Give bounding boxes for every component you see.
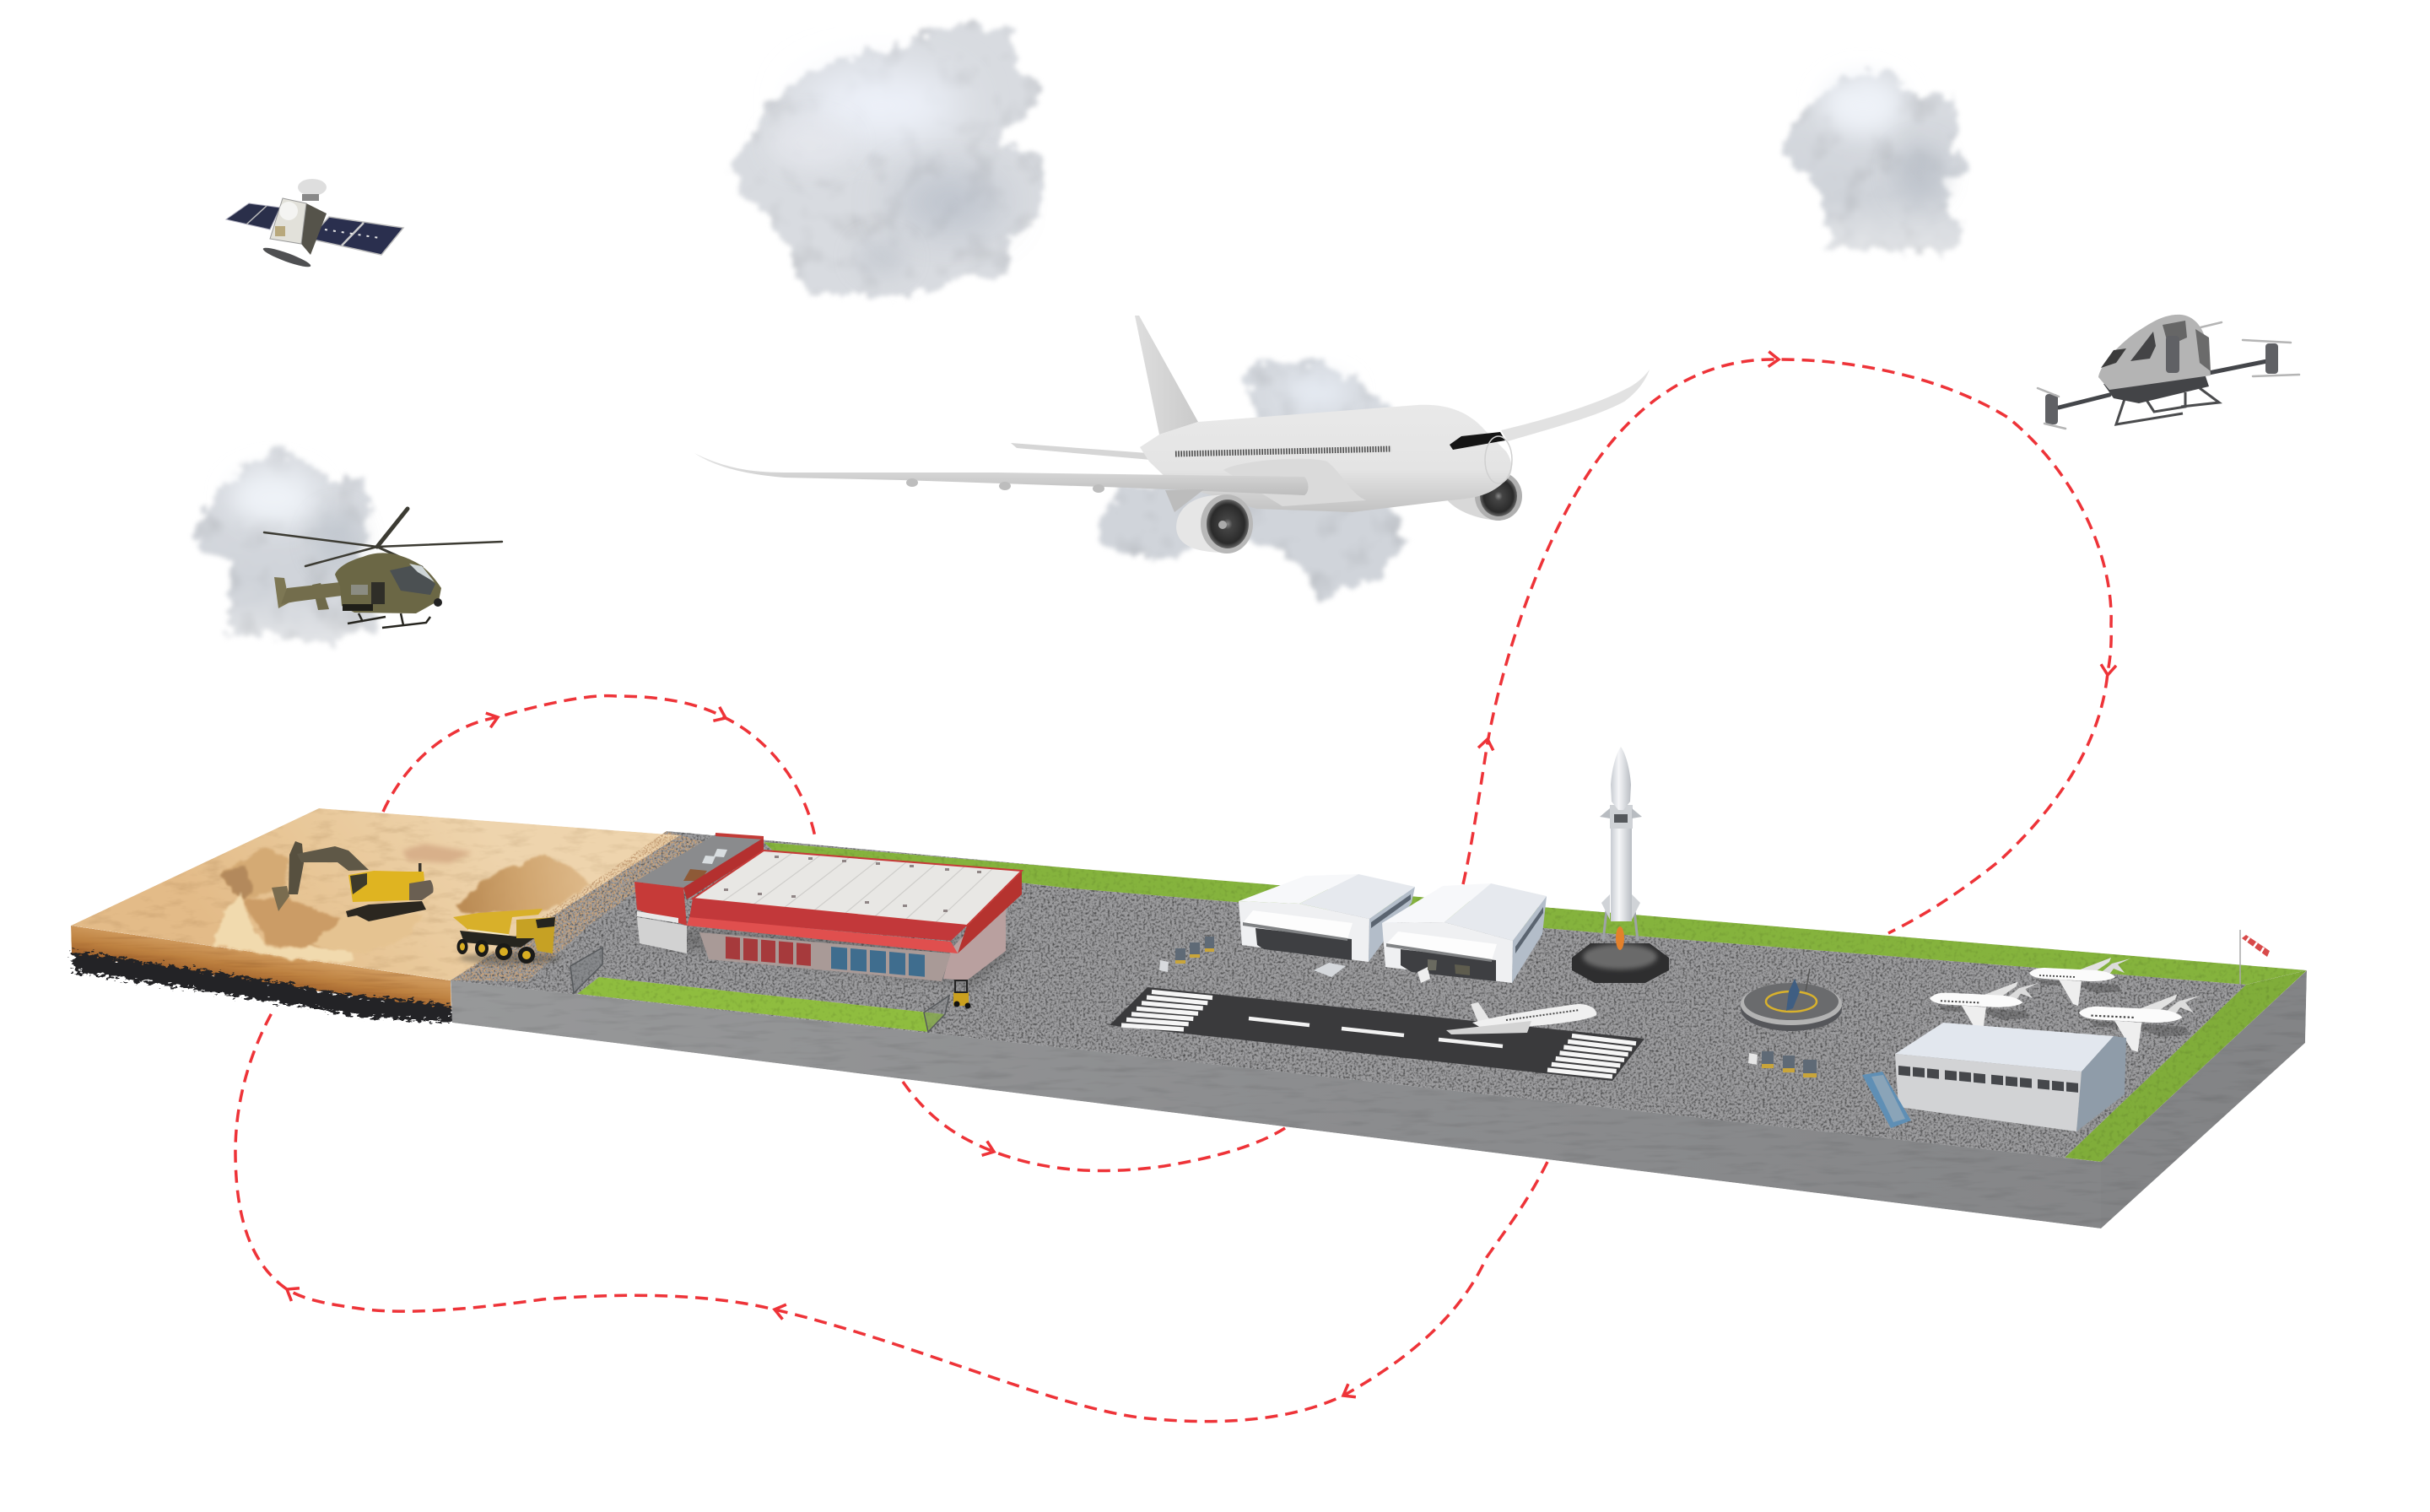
fuselage <box>1140 405 1512 512</box>
small back mound <box>402 844 472 863</box>
pad smoke <box>1583 944 1657 969</box>
excavation site <box>211 844 591 962</box>
icon: forklift <box>953 980 970 1009</box>
red warehouse <box>634 833 1022 987</box>
annex windows <box>637 911 678 923</box>
cab block <box>516 917 555 953</box>
windows <box>2091 1016 2135 1018</box>
front lower wall <box>699 932 951 981</box>
annex roof <box>634 834 764 888</box>
body dark side <box>301 203 327 255</box>
cloud: behind helicopter <box>194 451 380 643</box>
near wing <box>694 453 1308 495</box>
lower stage <box>1611 827 1632 921</box>
gravel surface <box>451 831 2307 1162</box>
sand to gravel transition <box>451 831 705 981</box>
arrow 1 <box>486 710 500 727</box>
nose radome <box>1485 436 1512 483</box>
truss <box>1243 922 1347 941</box>
path: upper right loop <box>1463 359 2111 933</box>
door opening <box>1256 928 1352 960</box>
arrow 2 <box>713 707 729 725</box>
fin <box>2098 958 2130 978</box>
rotor blades <box>264 509 502 567</box>
arrow 7 <box>1478 737 1495 750</box>
roof right plane <box>1299 874 1415 919</box>
roof <box>693 850 1022 926</box>
roof right plane <box>1444 883 1547 941</box>
fuselage <box>2029 968 2115 981</box>
top dish <box>298 179 327 196</box>
body <box>348 871 424 902</box>
arrow 4 <box>1340 1384 1356 1402</box>
fin <box>2005 983 2039 1003</box>
cloud: behind airliner <box>1098 359 1407 599</box>
near wing <box>1962 1006 1986 1034</box>
lower hull <box>2103 374 2209 403</box>
side windows <box>1515 907 1543 953</box>
path: upper left loop <box>383 696 816 841</box>
far wing <box>2078 958 2111 975</box>
right wall <box>2076 1036 2126 1131</box>
cabin <box>2098 315 2211 390</box>
near wing <box>2059 980 2082 1006</box>
icon: parked jet B <box>1930 982 2039 1034</box>
annex red wall <box>634 882 687 926</box>
skylights <box>714 849 727 857</box>
right concrete side <box>2101 970 2307 1228</box>
fuselage <box>2079 1007 2182 1023</box>
mound below tracks <box>310 914 424 953</box>
hangar 1 <box>1239 874 1415 962</box>
big dirt pile <box>456 855 591 914</box>
back ridge <box>219 848 289 900</box>
front fascia <box>689 899 967 941</box>
fuselage <box>1930 993 2022 1007</box>
landing gear <box>2116 388 2219 424</box>
right solar panel <box>310 217 403 255</box>
awning <box>687 917 958 953</box>
skids <box>348 613 430 628</box>
tail fins <box>274 577 289 608</box>
tracks <box>346 901 426 921</box>
icon: excavator <box>272 841 434 921</box>
icon: satellite <box>226 179 403 270</box>
icon: dump truck <box>453 909 561 964</box>
annex white wall <box>637 917 687 953</box>
body white side <box>270 198 306 244</box>
camera <box>434 598 442 607</box>
near wing <box>2114 1021 2141 1052</box>
warehouse shadow <box>640 928 1012 987</box>
icon: helicopter <box>264 509 502 628</box>
diorama base block <box>71 808 2307 1228</box>
grass: right strip <box>2065 970 2307 1162</box>
flap fairings <box>906 478 1104 493</box>
far wing <box>1983 982 2018 1001</box>
bed <box>453 909 543 935</box>
cloud: large top centre <box>728 25 1044 302</box>
arrow 8 <box>1768 352 1779 367</box>
windsock <box>2240 930 2270 985</box>
luggage carts left <box>1159 937 1214 972</box>
side wall lower <box>943 890 1006 980</box>
grass: back strip <box>764 842 2307 985</box>
wheels <box>457 939 535 964</box>
tail fin <box>1135 316 1198 435</box>
launch pad <box>1572 943 1669 983</box>
engine pylon <box>1165 489 1204 512</box>
door opening <box>1401 949 1496 981</box>
red doors <box>726 937 811 966</box>
boarding stairs <box>1862 1072 1911 1128</box>
chassis <box>460 931 534 948</box>
arrow 5 <box>773 1302 786 1320</box>
fence <box>570 948 949 1032</box>
icon: parked jet A <box>2029 958 2130 1006</box>
roof left plane <box>1239 874 1358 904</box>
rocket <box>1572 747 1669 983</box>
cab window <box>350 873 367 894</box>
arrow 3 <box>982 1141 996 1158</box>
counterweight <box>409 880 434 900</box>
front wall <box>1895 1054 2082 1131</box>
far wing <box>2138 994 2177 1016</box>
path: lower sweep <box>235 1010 1547 1422</box>
right wall <box>1369 887 1415 962</box>
centreline <box>1249 1018 1503 1046</box>
landing legs <box>1603 903 1638 941</box>
tailplane <box>1011 443 1161 461</box>
rotors <box>2045 336 2278 424</box>
cabin windows <box>1175 449 1391 454</box>
shadow <box>1939 1006 2030 1020</box>
front <box>1239 901 1369 962</box>
side windows <box>1371 894 1411 928</box>
windows <box>1898 1066 2078 1093</box>
grass: front patch <box>577 977 945 1032</box>
sand top <box>71 808 680 980</box>
wing root fairing <box>1223 459 1366 506</box>
icon: parked jet C <box>2079 994 2200 1052</box>
near engine <box>1176 494 1253 554</box>
icon: business jet on runway <box>1446 1002 1596 1034</box>
helipad <box>1741 969 1842 1031</box>
bottom dish <box>262 245 312 270</box>
hangar 2 <box>1382 883 1547 983</box>
arrow 6 <box>283 1282 300 1301</box>
roof <box>1895 1023 2114 1072</box>
arrow 9 <box>2100 664 2116 676</box>
terminal building <box>1895 1023 2126 1131</box>
truss <box>1386 943 1492 962</box>
lit front ridge <box>211 894 354 962</box>
threshold stripes <box>1121 992 1636 1077</box>
stick <box>289 841 304 894</box>
arms <box>2059 361 2267 408</box>
nose and upper stage <box>1611 747 1631 810</box>
ground vehicles by hangars <box>1314 959 1470 983</box>
cloud: top right <box>1783 69 1966 253</box>
annex right parapet <box>683 838 764 899</box>
shadow <box>2089 1021 2190 1037</box>
right wall <box>1512 896 1547 983</box>
canopy <box>390 565 435 595</box>
icon: airliner <box>694 316 1650 554</box>
fuselage <box>335 553 441 613</box>
bucket <box>272 886 289 911</box>
far engine <box>1443 472 1522 521</box>
soil side <box>71 926 452 1023</box>
front <box>1382 922 1513 983</box>
path: under block <box>903 1082 1285 1171</box>
shadow <box>2038 980 2122 993</box>
boom <box>297 846 369 871</box>
windows <box>1941 1001 1979 1002</box>
door header <box>1243 910 1353 939</box>
far wing <box>1501 370 1650 441</box>
tail boom <box>281 582 342 604</box>
flame <box>1616 926 1624 950</box>
missile pod <box>343 604 373 611</box>
runway <box>1110 987 1644 1081</box>
fin <box>2162 996 2200 1018</box>
exhaust <box>418 863 422 872</box>
front concrete side <box>451 980 2101 1228</box>
interstage <box>1610 805 1633 829</box>
left solar panel <box>226 203 280 230</box>
blue doors <box>831 947 925 977</box>
flight path loops <box>235 352 2116 1422</box>
helipad helicopter <box>1786 979 1800 1011</box>
windows <box>2039 975 2076 977</box>
cockpit <box>1450 432 1505 450</box>
side wall red <box>958 871 1022 953</box>
icon: passenger drone <box>2038 315 2299 429</box>
pit floor <box>242 897 343 948</box>
ground shadow <box>460 953 561 964</box>
door header <box>1386 932 1497 960</box>
luggage carts right <box>1748 1051 1817 1077</box>
roof left plane <box>1382 883 1491 923</box>
